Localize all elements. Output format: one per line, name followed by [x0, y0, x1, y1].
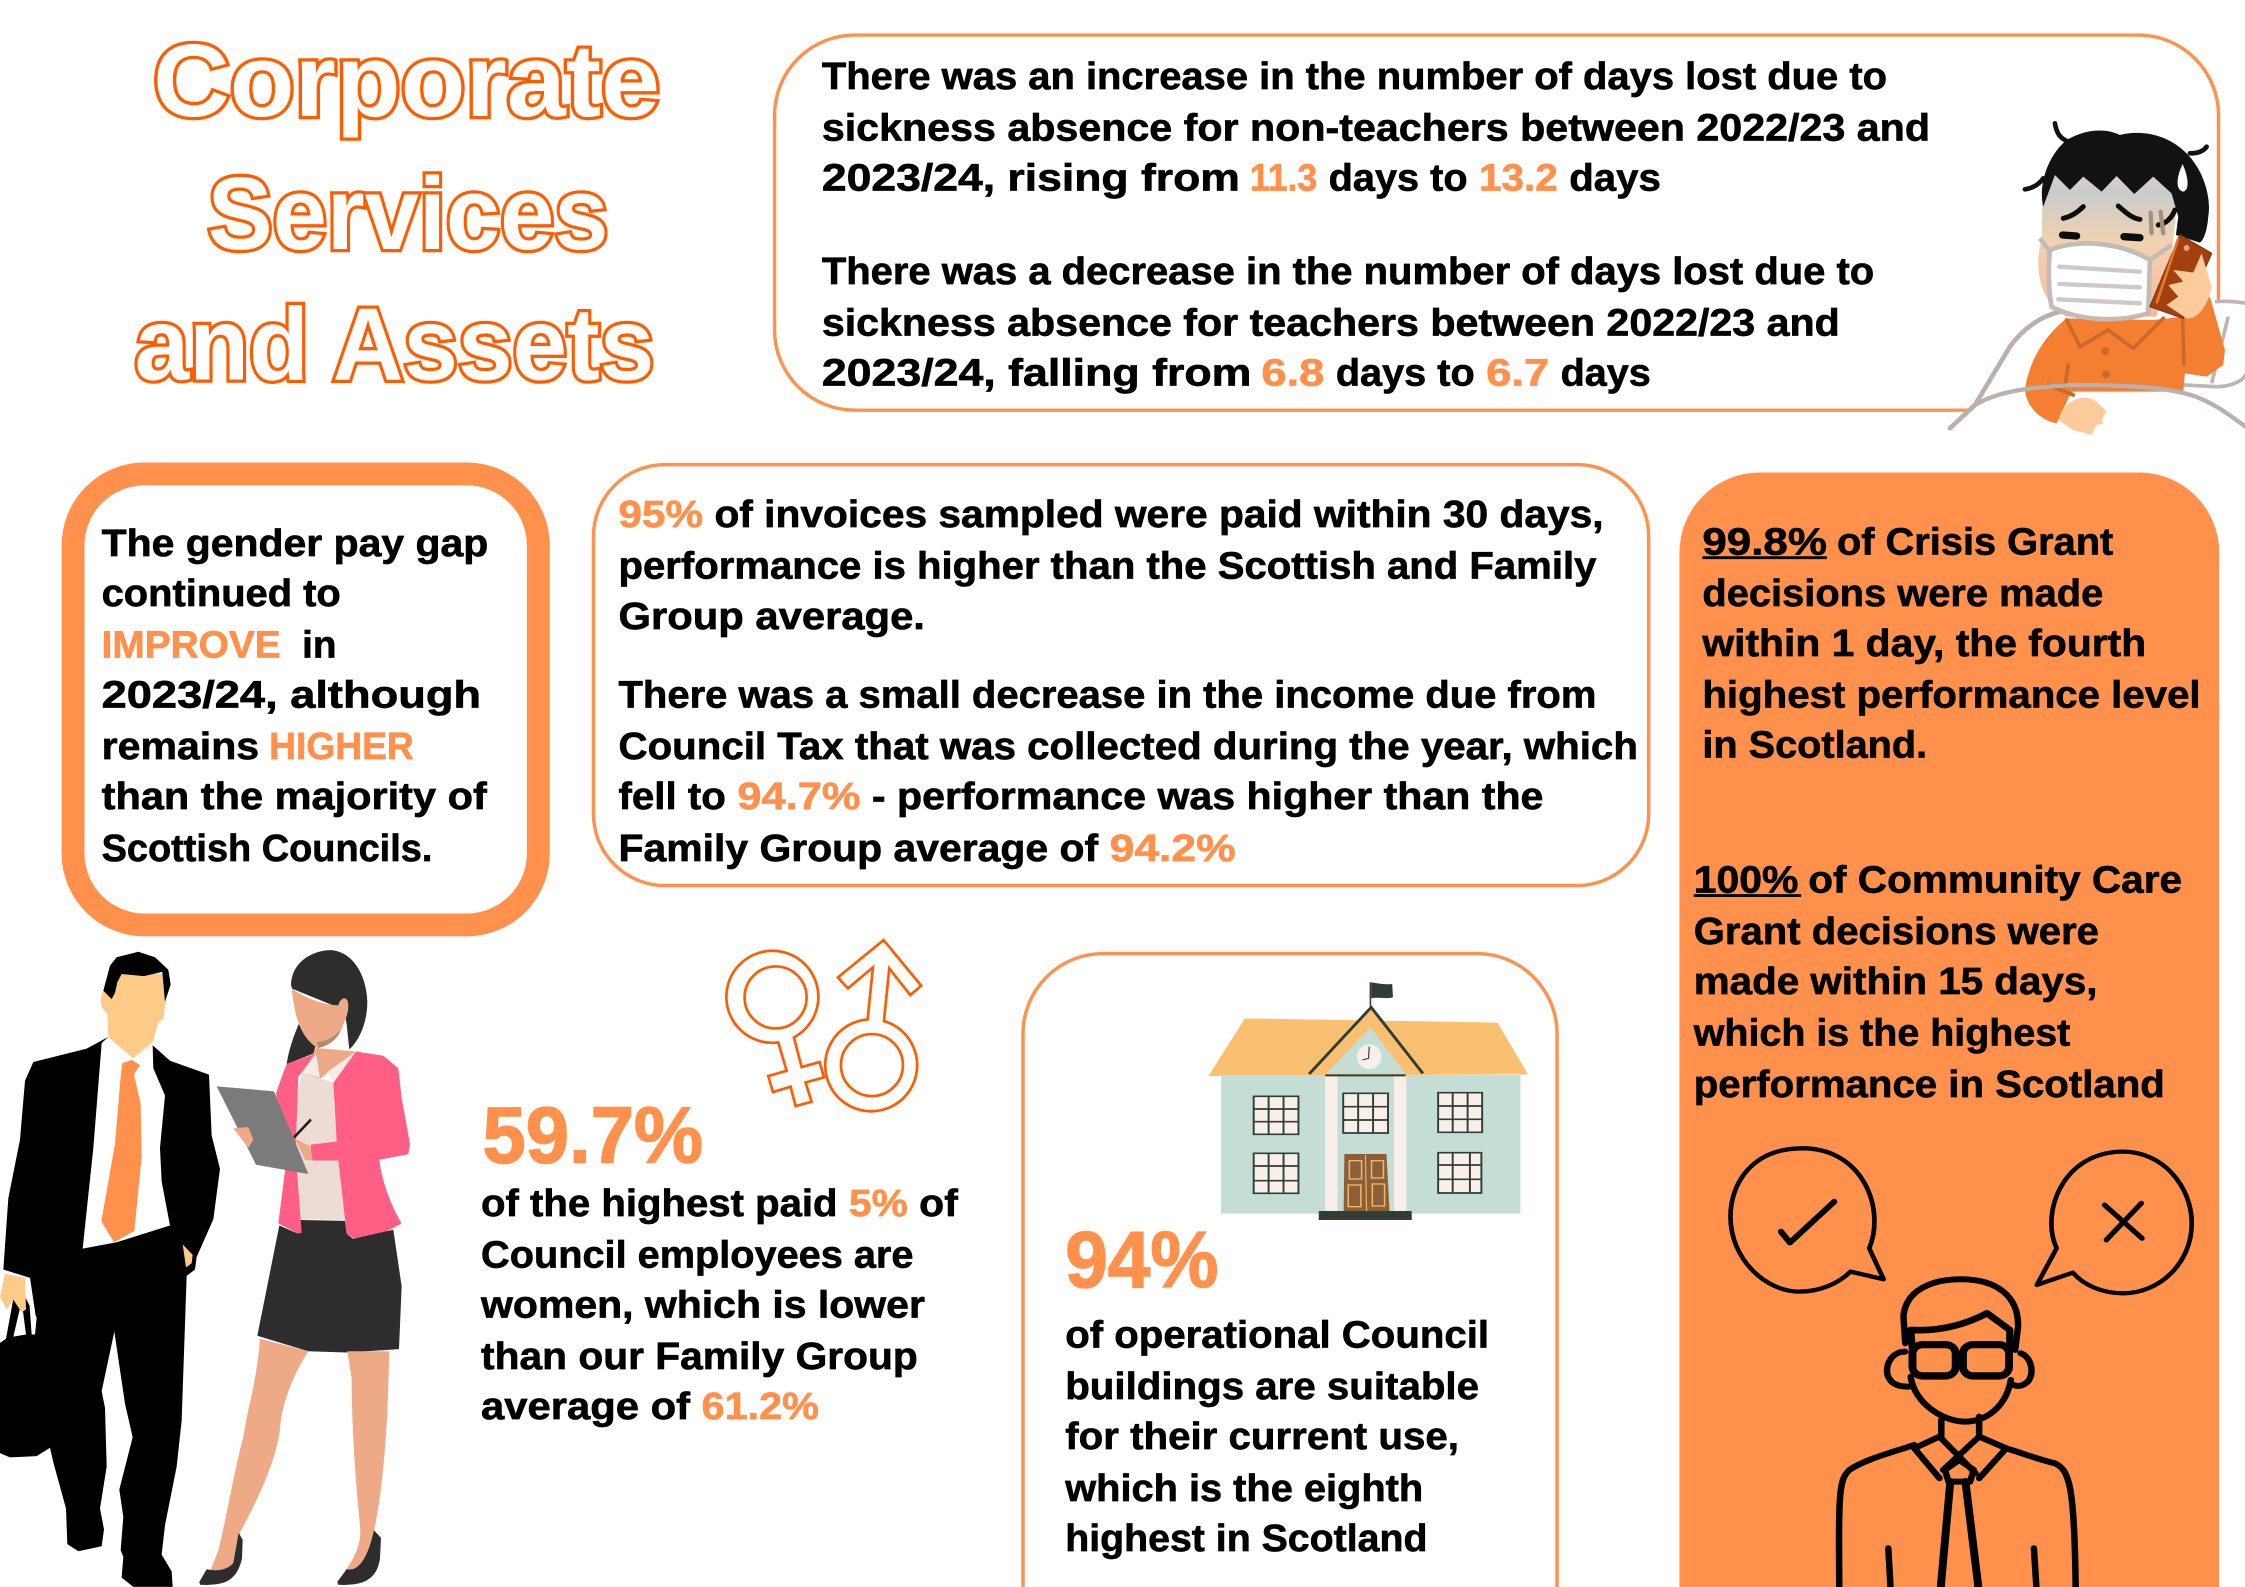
panel: sickness absence: There was an increase in the number of days lost due to	[822, 56, 1887, 98]
panel: invoices and council tax: Family Group average of	[619, 828, 1099, 870]
panel: grant decisions: of Community Care	[1808, 859, 2182, 901]
panel: grant decisions: decisions were made	[1702, 573, 2103, 615]
stat: highest paid women: than our Family Group	[481, 1336, 918, 1378]
title: Corporate	[153, 23, 660, 138]
icon: sketched man with tick and cross speech bubbles	[1730, 1148, 2192, 1587]
panel: gender pay gap: than the majority of	[102, 776, 487, 818]
panel: grant decisions: 99.8%	[1702, 521, 1827, 563]
panel: sickness absence: days to	[1336, 352, 1475, 394]
panel: invoices and council tax	[593, 465, 1649, 886]
panel: sickness absence: days	[1561, 352, 1651, 394]
panel: grant decisions: highest performance level	[1702, 675, 2201, 717]
panel: sickness absence: sickness absence for teachers between 2022/23 and	[822, 302, 1840, 344]
panel: operational buildings: buildings are suitable	[1065, 1366, 1479, 1408]
panel: gender pay gap: HIGHER	[269, 726, 414, 768]
stat: highest paid women: average of	[481, 1386, 691, 1428]
panel: sickness absence: 6.7	[1486, 352, 1549, 394]
panel: invoices and council tax: Council Tax that was collected during the year, which	[619, 726, 1638, 768]
stat: highest paid women	[480, 1090, 958, 1428]
panel: operational buildings: for their current use,	[1065, 1416, 1459, 1458]
panel: invoices and council tax: 94.7%	[737, 776, 860, 818]
icon: male and female business people	[0, 950, 410, 1587]
panel: sickness absence: 11.3	[1250, 158, 1317, 200]
panel: sickness absence: 2023/24, falling from	[822, 352, 1251, 394]
panel: invoices and council tax: fell to	[619, 776, 726, 818]
panel: invoices and council tax: There was a small decrease in the income due from	[619, 675, 1596, 717]
panel: grant decisions: within 1 day, the fourth	[1701, 623, 2146, 665]
stat: highest paid women: of the highest paid	[481, 1183, 838, 1225]
panel: gender pay gap	[73, 474, 538, 925]
panel: sickness absence: 2023/24, rising from	[822, 158, 1240, 200]
panel: invoices and council tax: Group average.	[619, 596, 925, 638]
panel: grant decisions: which is the highest	[1693, 1012, 2071, 1054]
panel: gender pay gap: remains	[102, 726, 259, 768]
panel: sickness absence: days	[1569, 158, 1661, 200]
panel: sickness absence: There was a decrease in the number of days lost due to	[822, 251, 1874, 293]
stat: highest paid women: 61.2%	[702, 1386, 819, 1428]
panel: gender pay gap: continued to	[102, 573, 341, 615]
panel: invoices and council tax: 95%	[619, 494, 703, 536]
stat: highest paid women: 59.7%	[483, 1090, 703, 1180]
panel: operational buildings: which is the eighth	[1064, 1468, 1423, 1510]
panel: sickness absence: 6.8	[1261, 352, 1324, 394]
panel: gender pay gap: The gender pay gap	[102, 523, 488, 565]
title: and Assets	[135, 286, 654, 401]
panel: sickness absence: sickness absence for non-teachers between 2022/23 and	[822, 108, 1930, 150]
stat: highest paid women: of	[919, 1183, 958, 1225]
title	[135, 23, 660, 401]
panel: sickness absence	[775, 35, 2219, 410]
panel: grant decisions: made within 15 days,	[1694, 961, 2098, 1003]
panel: operational buildings: highest in Scotland	[1065, 1518, 1427, 1560]
panel: invoices and council tax: - performance was higher than the	[872, 776, 1543, 818]
panel: invoices and council tax: of invoices sampled were paid within 30 days,	[714, 494, 1604, 536]
panel: grant decisions: Grant decisions were	[1694, 911, 2099, 953]
panel: grant decisions: in Scotland.	[1702, 725, 1927, 767]
panel: gender pay gap: IMPROVE	[102, 624, 281, 666]
icon: sick person in bed with mask and phone	[1950, 123, 2245, 457]
panel: operational buildings: 94%	[1065, 1214, 1218, 1304]
panel: sickness absence: days to	[1329, 158, 1468, 200]
stat: highest paid women: Council employees are	[481, 1234, 913, 1276]
panel: grant decisions	[1679, 472, 2219, 1587]
icon: gender symbols	[726, 940, 921, 1111]
icon: school building	[1209, 982, 1528, 1220]
stat: highest paid women: 5%	[849, 1183, 908, 1225]
panel: gender pay gap: Scottish Councils.	[102, 828, 432, 870]
panel: grant decisions: of Crisis Grant	[1837, 521, 2114, 563]
title: Services	[208, 156, 608, 271]
panel: grant decisions: performance in Scotland	[1694, 1064, 2165, 1106]
panel: grant decisions: 100%	[1694, 859, 1798, 901]
panel: sickness absence: 13.2	[1479, 158, 1558, 200]
panel: invoices and council tax: performance is higher than the Scottish and Family	[619, 546, 1596, 588]
panel: gender pay gap: 2023/24, although	[102, 675, 481, 717]
panel: invoices and council tax: 94.2%	[1110, 828, 1236, 870]
stat: highest paid women: women, which is lower	[480, 1285, 925, 1327]
panel: operational buildings	[1023, 954, 1557, 1587]
panel: gender pay gap: in	[302, 624, 336, 666]
panel: operational buildings: of operational Council	[1065, 1315, 1489, 1357]
